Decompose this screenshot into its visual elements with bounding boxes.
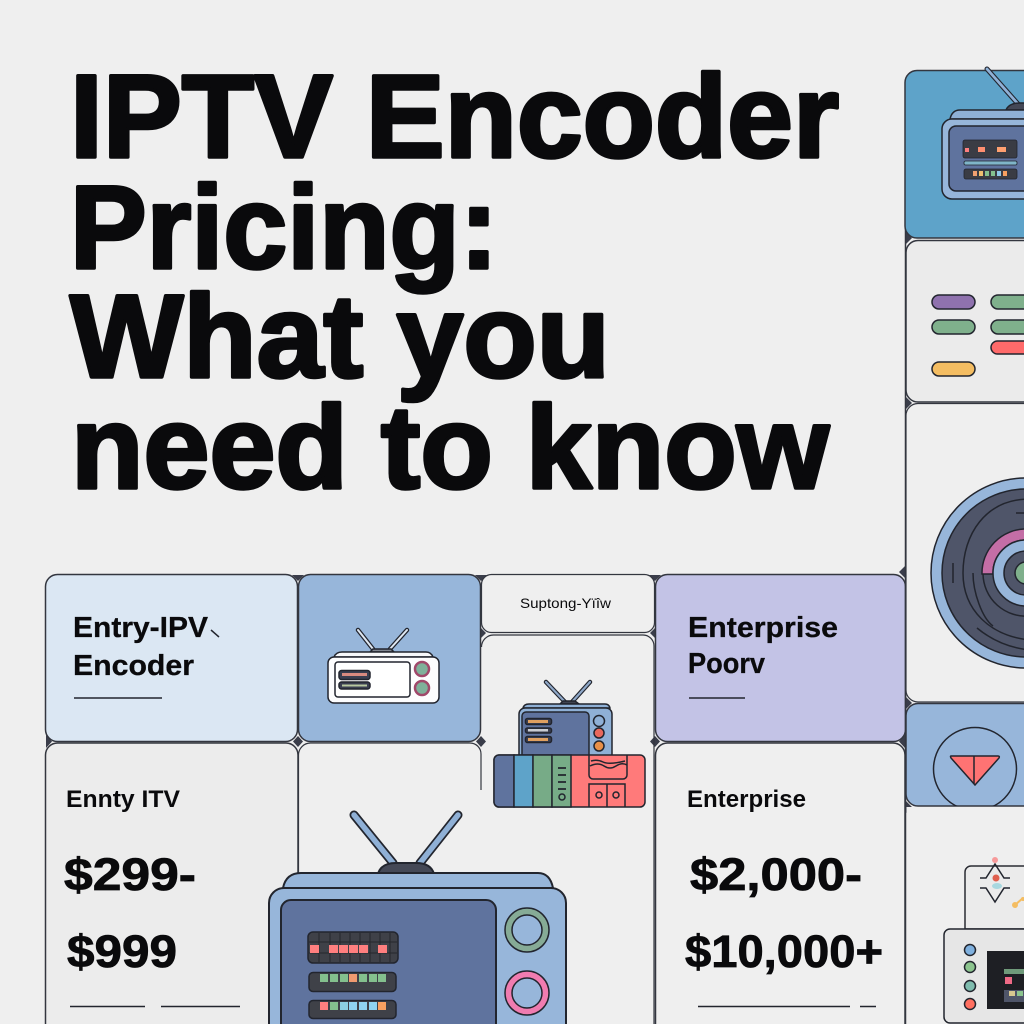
title: Pricing: bbox=[70, 162, 498, 294]
title: need to know bbox=[71, 382, 830, 514]
entry header rule bbox=[74, 630, 219, 698]
panel: white encoder bbox=[298, 574, 480, 742]
label text: Suptong-Yïîw bbox=[520, 595, 612, 611]
entry price: $299- bbox=[64, 849, 196, 900]
panel: entry header bbox=[46, 574, 298, 742]
icon: large tv bbox=[269, 815, 566, 1024]
enterprise rules bbox=[698, 1006, 876, 1008]
icon: white encoder bbox=[328, 630, 439, 703]
icon: down triangle bbox=[934, 728, 1016, 810]
right column frame line bbox=[904, 82, 906, 1024]
enterprise price: $10,000+ bbox=[685, 926, 883, 977]
icon: control device bbox=[944, 929, 1024, 1023]
icon: stacked tv and books bbox=[494, 682, 645, 807]
panel: enterprise header bbox=[656, 574, 906, 742]
enterprise price bbox=[685, 849, 883, 977]
enterprise price: $2,000- bbox=[690, 849, 862, 900]
panel: center lower bbox=[298, 635, 654, 1024]
icon: vinyl disc bbox=[931, 478, 1024, 668]
title: What you bbox=[70, 271, 610, 403]
entry header text bbox=[73, 612, 209, 682]
led row 3 bbox=[309, 1000, 396, 1018]
entry rules bbox=[70, 1006, 240, 1008]
enterprise header text: Poorv bbox=[688, 648, 765, 680]
entry label: Ennty ITV bbox=[66, 786, 180, 813]
led row 2 bbox=[309, 972, 396, 992]
icon: right tv bbox=[942, 69, 1024, 199]
panel: triangle badge bbox=[906, 704, 1024, 810]
enterprise header text bbox=[688, 612, 838, 680]
icon: analytics card bbox=[965, 857, 1024, 929]
panel: entry pricing bbox=[46, 743, 298, 1024]
panel: supporting label bbox=[482, 574, 654, 632]
panel: enterprise pricing bbox=[656, 743, 905, 1024]
enterprise header rule bbox=[689, 697, 745, 699]
title bbox=[70, 51, 839, 514]
status pills bbox=[932, 295, 1024, 376]
panel: analytics device bbox=[906, 807, 1024, 1024]
enterprise label: Enterprise bbox=[687, 786, 806, 813]
entry price bbox=[64, 849, 196, 977]
title: IPTV Encoder bbox=[70, 51, 839, 183]
panel: vinyl disc bbox=[906, 404, 1024, 702]
panel: status pills bbox=[906, 240, 1024, 402]
entry header text: Encoder bbox=[73, 650, 194, 682]
entry price: $999 bbox=[67, 926, 177, 977]
enterprise header text: Enterprise bbox=[688, 612, 838, 644]
entry header text: Entry-IPV bbox=[73, 612, 209, 644]
panel: right tv bbox=[905, 69, 1024, 238]
panel: grid junctions bbox=[46, 231, 912, 814]
led row 1 bbox=[308, 932, 398, 963]
